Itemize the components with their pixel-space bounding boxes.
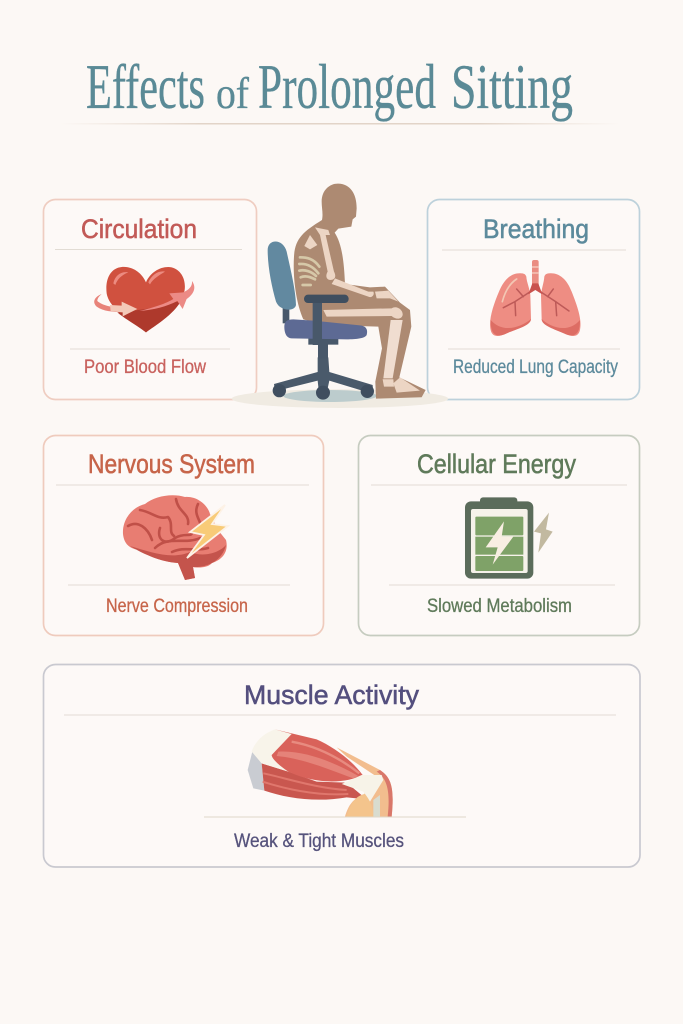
heading: nervous system: Nervous System (88, 449, 255, 479)
title: Sitting (451, 52, 573, 122)
caption: slowed metabolism: Slowed Metabolism (427, 596, 572, 617)
panel: breathing (428, 200, 640, 400)
caption: reduced lung capacity: Reduced Lung Capacity (453, 357, 618, 378)
heading: cellular energy: Cellular Energy (417, 449, 576, 479)
title: Prolonged (258, 52, 436, 122)
panel: nervous system (44, 436, 324, 636)
panel: muscle activity (44, 664, 640, 867)
icon: battery with bolt (465, 497, 553, 579)
seat and armrest (284, 319, 367, 339)
chair (268, 241, 374, 400)
bones (304, 227, 420, 393)
icon: brain with lightning bolt (123, 495, 228, 580)
icon: heart with flow arrows (94, 267, 194, 332)
floor shadow (232, 389, 448, 408)
caption: poor blood flow: Poor Blood Flow (84, 357, 206, 378)
caption: nerve compression: Nerve Compression (106, 596, 248, 617)
heading: breathing: Breathing (483, 214, 589, 244)
heading: muscle activity: Muscle Activity (244, 680, 419, 710)
caption: weak and tight muscles: Weak & Tight Muscles (234, 831, 404, 852)
heading: circulation: Circulation (81, 214, 197, 244)
panel: cellular energy (358, 436, 640, 636)
icon: lungs (490, 260, 581, 336)
illustration: seated figure on office chair (232, 184, 448, 408)
title (86, 52, 573, 122)
title: of (216, 69, 249, 118)
body (294, 184, 426, 399)
title: Effects (86, 52, 205, 122)
panel: circulation (44, 200, 256, 400)
icon: thigh muscle (248, 729, 393, 817)
